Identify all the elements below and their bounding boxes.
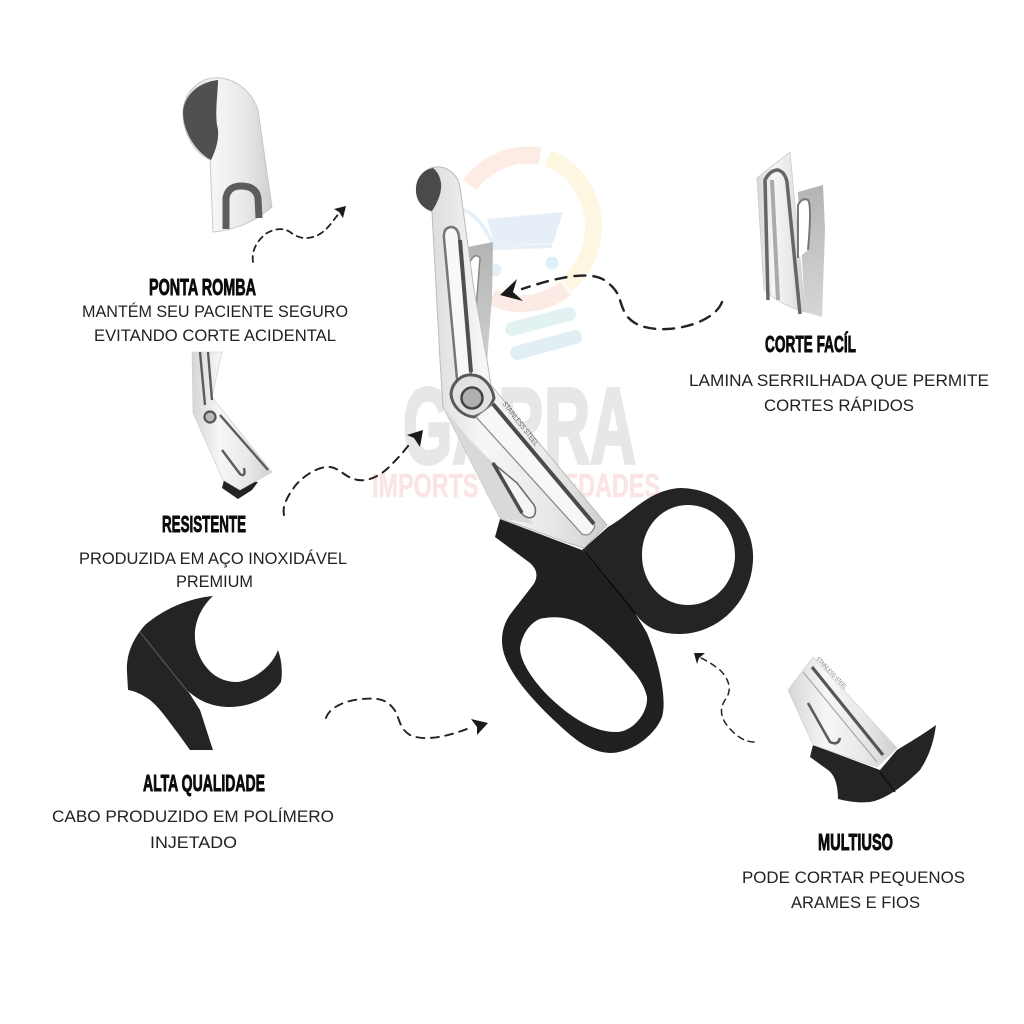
heading: alta qualidade: ALTA QUALIDADE bbox=[143, 770, 265, 796]
steel bbox=[788, 657, 897, 767]
upper ring handle bbox=[582, 488, 753, 634]
lower edge shading bbox=[443, 407, 534, 524]
inset: pivot bbox=[192, 352, 272, 499]
engraving: STAINLESS STEEL bbox=[815, 656, 848, 691]
text: ponta romba: EVITANDO CORTE ACIDENTAL bbox=[94, 327, 336, 345]
text: multiuso bbox=[742, 869, 965, 912]
dashed path bbox=[699, 657, 754, 742]
arrowhead bbox=[407, 430, 423, 447]
text: corte facil: LAMINA SERRILHADA QUE PERMITE bbox=[689, 372, 989, 390]
text: resistente: PRODUZIDA EM AÇO INOXIDÁVEL bbox=[79, 549, 347, 568]
small slot bbox=[808, 703, 840, 743]
black base bbox=[810, 725, 936, 802]
upper slot bbox=[444, 227, 471, 390]
lower slot dark line bbox=[493, 404, 594, 524]
blade engraving: STAINLESS STEEL bbox=[500, 400, 541, 448]
watermark cart bbox=[463, 210, 563, 276]
pivot bolt bbox=[204, 412, 216, 422]
blunt tip shadow bbox=[416, 168, 441, 211]
tip shadow bbox=[183, 80, 218, 160]
text: alta qualidade: CABO PRODUZIDO EM POLÍMERO bbox=[52, 807, 334, 826]
slot bbox=[765, 170, 800, 314]
inset: black handle bbox=[127, 596, 282, 750]
text: ponta romba: MANTÉM SEU PACIENTE SEGURO bbox=[82, 302, 348, 321]
black base bbox=[222, 480, 258, 499]
dark slot line bbox=[812, 667, 883, 755]
small slot bbox=[222, 450, 244, 475]
inner grey line bbox=[772, 180, 778, 300]
main scissors bbox=[416, 167, 753, 753]
heading: multiuso: MULTIUSO bbox=[818, 829, 893, 855]
handle seam bbox=[585, 552, 636, 614]
arrow: corte facil bbox=[500, 276, 722, 329]
text: multiuso: ARAMES E FIOS bbox=[791, 894, 920, 912]
steel bbox=[192, 352, 272, 490]
inset: serrated blade bbox=[757, 152, 825, 317]
small slot bbox=[798, 199, 810, 258]
tip slot bbox=[226, 186, 259, 229]
arrow: alta qualidade bbox=[326, 699, 488, 738]
arrowhead bbox=[471, 719, 488, 735]
light slot line bbox=[803, 672, 877, 762]
text: resistente bbox=[79, 549, 347, 591]
tip steel bbox=[183, 78, 272, 232]
black handles bbox=[495, 488, 753, 753]
slot dark line bbox=[460, 240, 471, 372]
text: multiuso: PODE CORTAR PEQUENOS bbox=[742, 869, 965, 887]
watermark bars bbox=[512, 314, 575, 353]
back blade slot bbox=[470, 256, 480, 310]
small lower slot bbox=[493, 463, 536, 518]
grey blade bbox=[798, 185, 825, 317]
pivot bolt bbox=[462, 388, 482, 408]
arrowhead bbox=[334, 206, 346, 218]
dashed path bbox=[522, 276, 722, 329]
arrowhead bbox=[694, 653, 705, 664]
dashed path bbox=[253, 212, 340, 262]
heading: corte facil: CORTE FACÍL bbox=[765, 330, 856, 357]
handle shape bbox=[127, 596, 282, 750]
watermark name: GARRA bbox=[403, 365, 636, 486]
lower loop handle bbox=[495, 519, 664, 753]
arrowhead bbox=[500, 279, 523, 301]
small slot dark line bbox=[493, 463, 522, 513]
text: corte facil: CORTES RÁPIDOS bbox=[764, 396, 914, 415]
base seam bbox=[880, 772, 895, 792]
text: alta qualidade bbox=[52, 807, 334, 852]
text: resistente: PREMIUM bbox=[176, 573, 253, 591]
steel blade bbox=[417, 167, 607, 548]
arrow: multiuso bbox=[694, 653, 754, 742]
pivot surround bbox=[451, 375, 494, 417]
watermark subtitle: IMPORTS & VARIEDADES bbox=[372, 467, 660, 504]
dashed path bbox=[284, 441, 412, 515]
handle seam bbox=[140, 632, 188, 692]
inset: blunt tip bbox=[183, 78, 272, 232]
watermark logo bbox=[372, 155, 660, 504]
arrow: ponta romba bbox=[253, 206, 346, 262]
dashed path bbox=[326, 699, 472, 738]
heading: resistente: RESISTENTE bbox=[162, 511, 246, 537]
watermark ring bbox=[470, 155, 594, 304]
text: ponta romba bbox=[82, 302, 348, 345]
lower long slot bbox=[476, 404, 595, 535]
text: corte facil bbox=[689, 372, 989, 415]
inset: blade base bbox=[788, 656, 936, 802]
steel blade bbox=[757, 152, 805, 312]
text: alta qualidade: INJETADO bbox=[150, 834, 237, 852]
back serrated blade bbox=[468, 242, 493, 392]
heading: ponta romba: PONTA ROMBA bbox=[149, 274, 256, 300]
slot lines bbox=[200, 352, 268, 470]
arrow: resistente bbox=[284, 430, 423, 515]
